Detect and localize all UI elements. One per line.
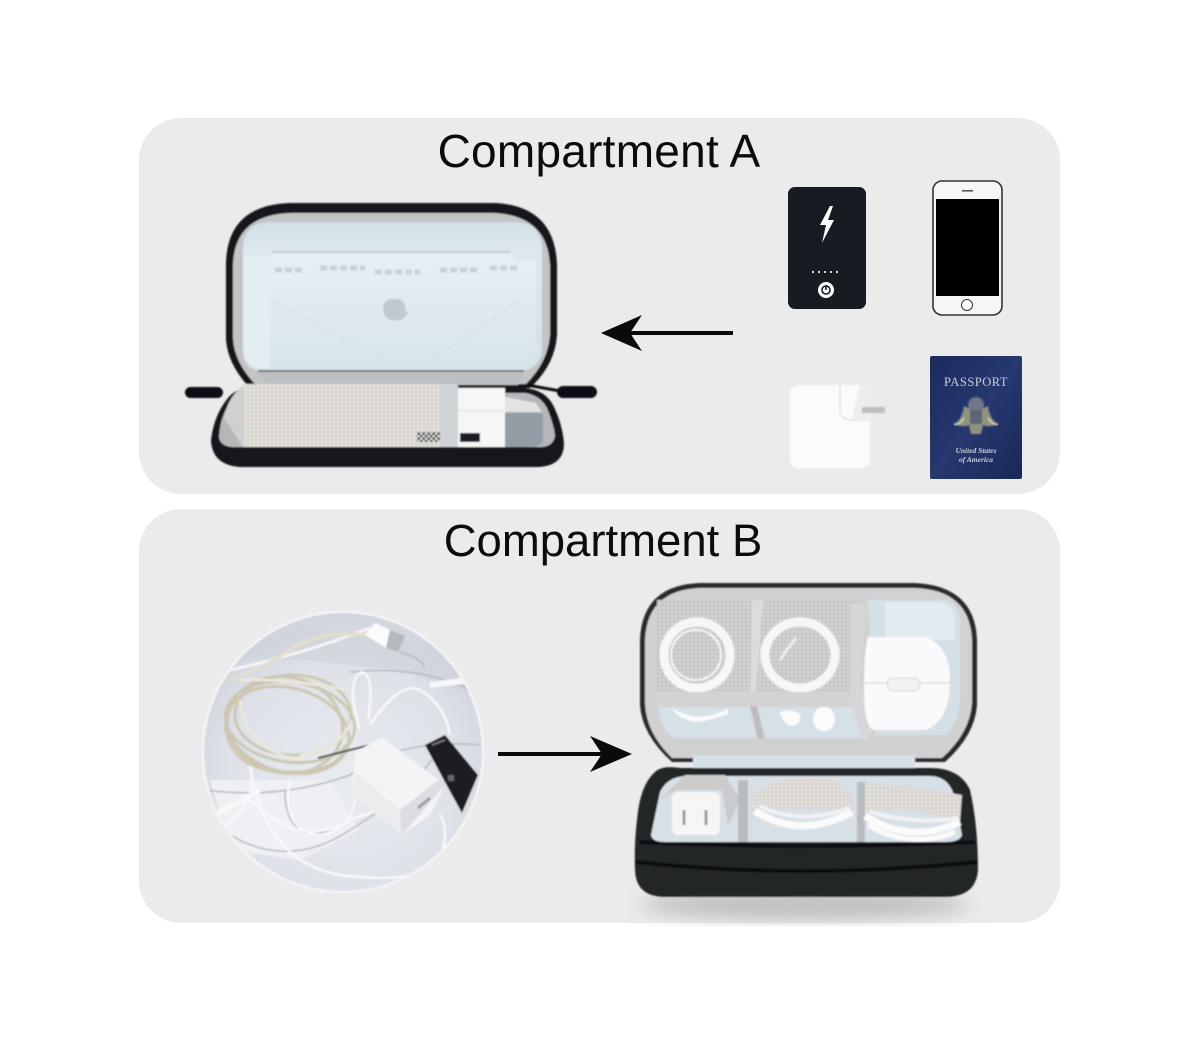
icon: passport [930,356,1022,479]
icon: eagle seal [954,397,998,434]
icon: passport: of America [959,455,993,464]
icon: passport: PASSPORT [944,375,1008,389]
panel: Compartment B [139,509,1060,923]
heading: Compartment B: Compartment B [444,515,762,566]
heading: Compartment A: Compartment A [438,125,760,177]
arrow: pointing right [498,736,632,772]
photo: organizer open with cables, mouse and earbuds [635,583,978,919]
photo: organizer open with laptop charger and power bank [185,203,597,467]
icon: charger [790,385,885,468]
arrow: pointing left [601,315,733,351]
icon: passport: United States [955,446,997,455]
icon: power bank [788,187,866,309]
photo: tangled cables and charger [200,611,490,893]
icon: smartphone [933,181,1002,315]
panel: Compartment A [139,118,1060,494]
